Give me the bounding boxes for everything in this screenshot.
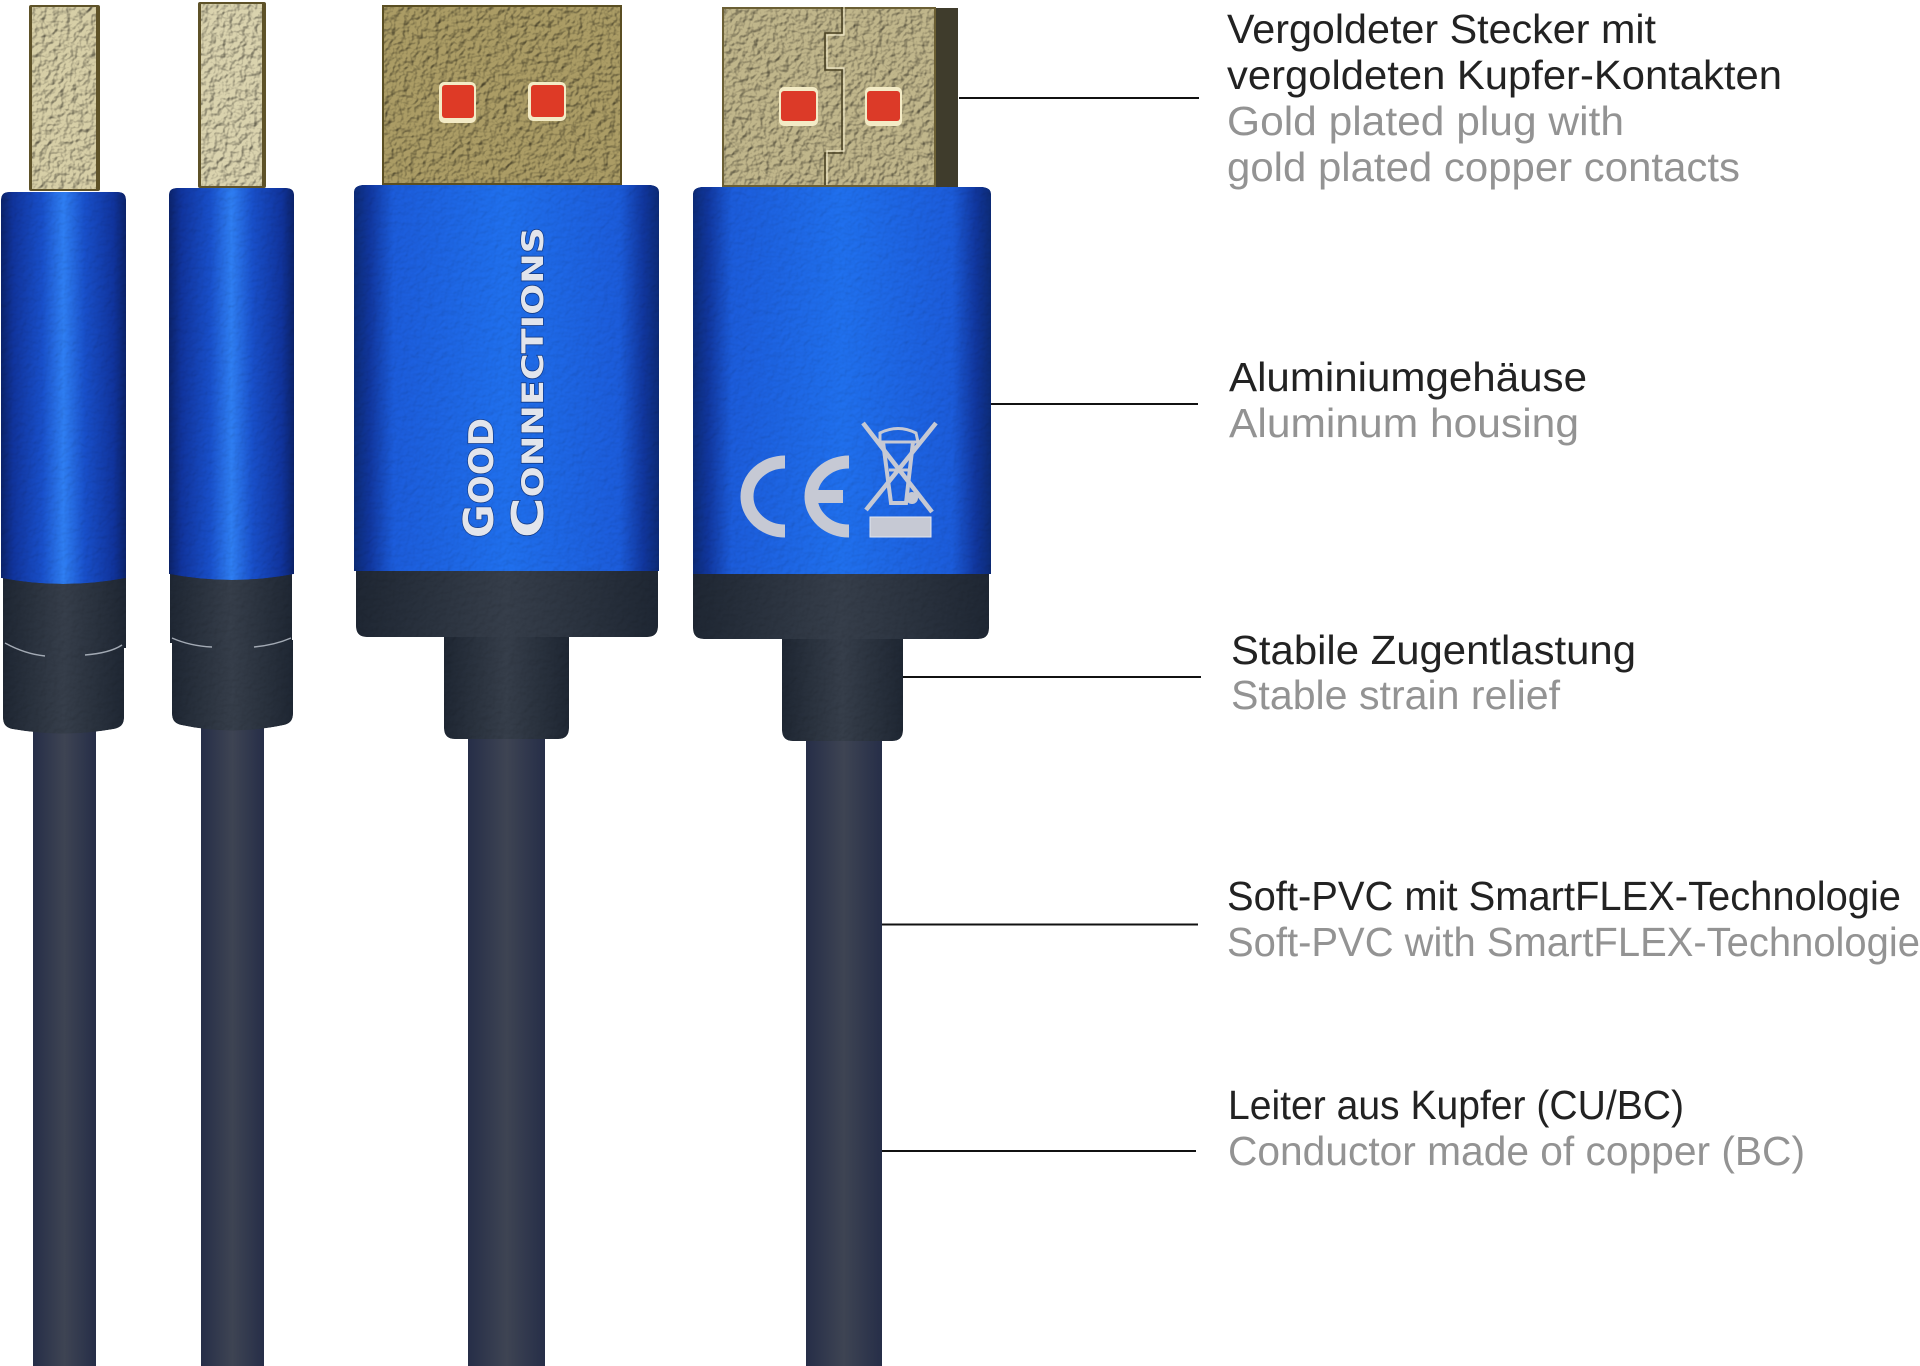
cable 1 aluminium housing [1,192,126,584]
cable 1: narrow plug side view [1,5,126,1366]
icon: CE mark [747,462,849,531]
cable 3 right contact window [528,82,566,121]
callout: strain relief [903,627,1636,718]
callout: aluminium housing: Aluminiumgehäuse [1229,354,1587,400]
callout: gold plated plug: Gold plated plug with [1227,98,1624,144]
callout: strain relief: Stable strain relief [1231,672,1561,718]
callout: soft PVC [882,873,1920,965]
cable 2 wire [201,728,264,1366]
callout: aluminium housing [991,354,1587,446]
brand lettering: Connections: CONNECTIONS [503,227,554,538]
callout: copper conductor: Leiter aus Kupfer (CU/BC) [1228,1082,1684,1128]
cable 1 wire [33,730,96,1366]
cable 2 strain relief [170,565,293,730]
callout: gold plated plug: Vergoldeter Stecker mit [1227,6,1657,52]
cable 2 aluminium housing [169,188,294,580]
callout: copper conductor: Conductor made of copper (BC) [1228,1128,1805,1174]
cable 3 aluminium housing [354,185,659,571]
callout: strain relief: Stabile Zugentlastung [1231,627,1636,673]
cable 1 gold plug [29,5,100,191]
cable 3 left contact window [439,82,476,123]
cable 4 right contact window [865,87,902,126]
cable 3 collar [356,570,658,637]
callout: gold plated plug: gold plated copper contacts [1227,144,1740,190]
cable 4 strain relief [782,636,903,741]
cable 3 strain relief [444,634,569,739]
cable 4 collar [693,570,989,639]
cable 3 gold plug [382,5,622,185]
cable 4 left contact window [779,87,818,126]
cable 1 strain relief [3,570,126,734]
cable 4 gold plug [722,7,958,187]
icon: crossed-out waste bin [863,423,936,537]
brand lettering: Good: GOOD [455,418,503,538]
cable 4 wire [806,735,882,1366]
cable 2 gold plug [198,2,266,188]
cable 4: large plug with certification marks [693,7,991,1366]
cable 3 wire [468,735,545,1366]
callout: soft PVC: Soft-PVC with SmartFLEX-Technologie [1227,919,1920,965]
callout: copper conductor [882,1082,1805,1174]
callout: gold plated plug [959,6,1782,190]
cable 4 aluminium housing [693,187,991,574]
callout: gold plated plug: vergoldeten Kupfer-Kontakten [1227,52,1782,98]
callout: aluminium housing: Aluminum housing [1229,400,1579,446]
cable 2: narrow plug side view [169,2,294,1366]
callout: soft PVC: Soft-PVC mit SmartFLEX-Technologie [1227,873,1901,919]
cable 3: large plug with brand lettering [354,5,659,1366]
